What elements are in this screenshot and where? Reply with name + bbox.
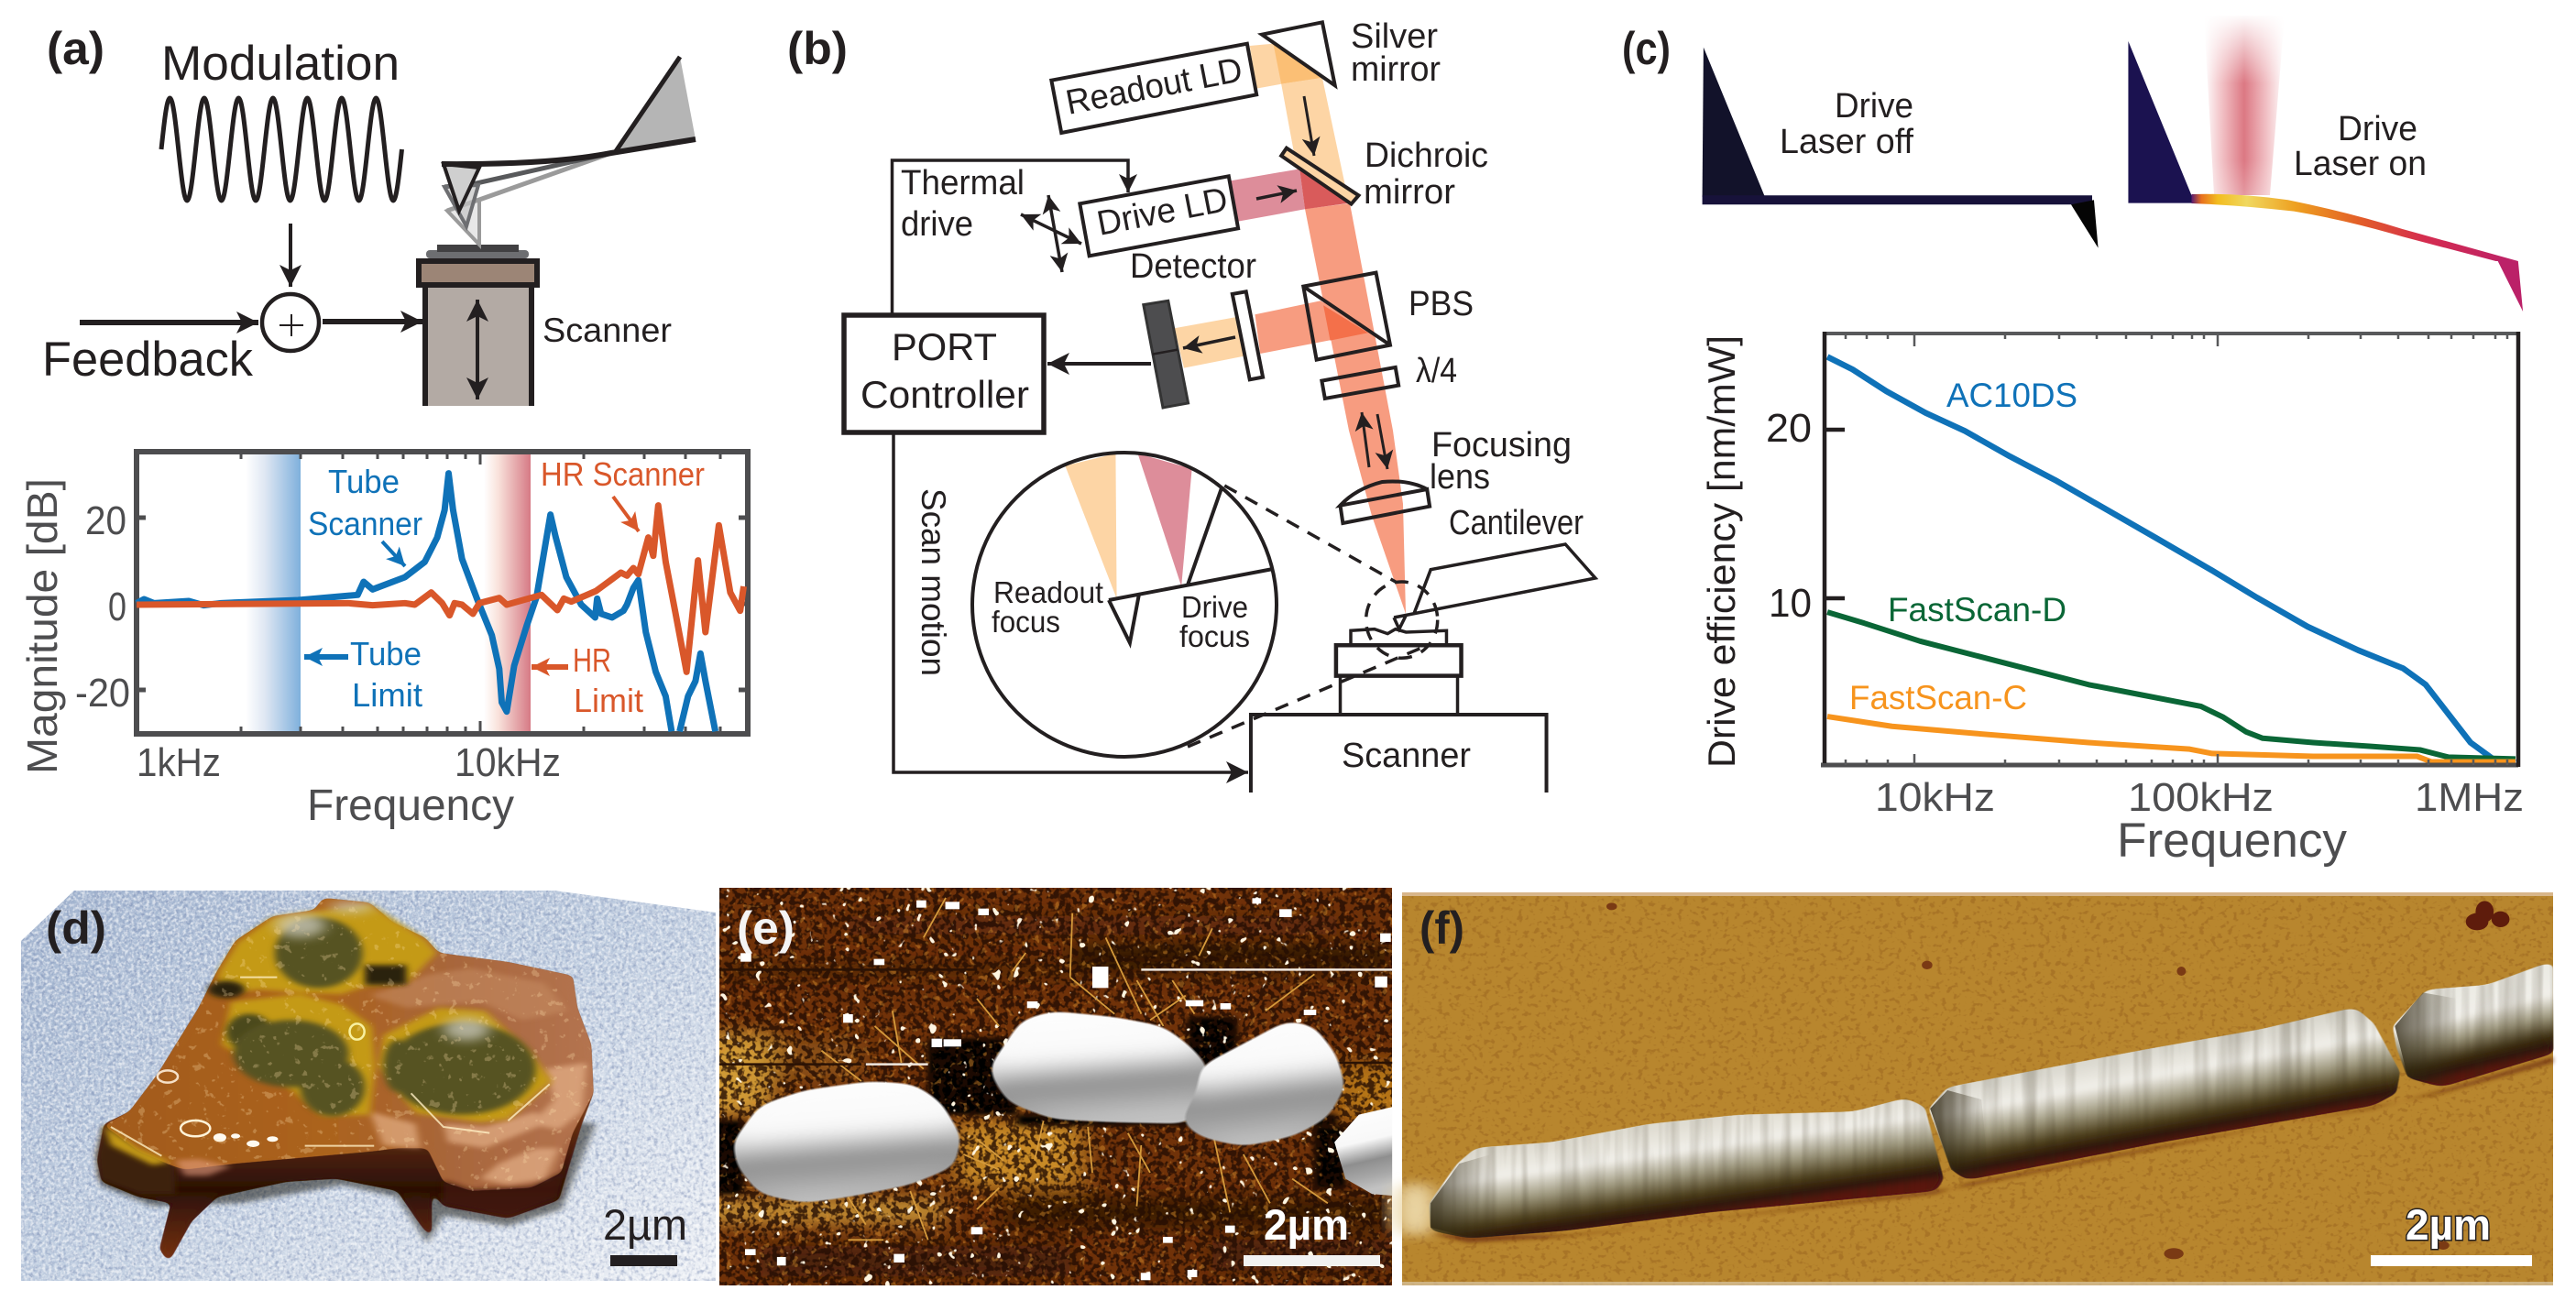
segment three [2393,960,2553,1088]
panel label (c): (c) [1622,23,1671,74]
drive laser diode box [1080,176,1238,256]
magnified inset circle [972,453,1277,757]
text: optic labels: Silver [1351,17,1438,56]
detector [1144,301,1189,408]
olive lump centres [208,918,536,1116]
x axis tick labels: 1MHz [2415,775,2524,820]
glow at chain start [1395,1182,1437,1237]
surface debris [1606,901,2509,1259]
text: optic labels: mirror [1364,173,1455,212]
panel (b): optical layout schematic [787,17,1595,793]
inset labels: Readout [993,575,1103,609]
panel (e): AFM image of bacteria and fibres [688,888,1412,1285]
label: Drive Laser on: Drive [2338,110,2417,148]
arrow: tube scanner pointer [382,541,405,566]
darker lower edge of right lobe [444,1133,573,1216]
arrow: modulation into summing node [289,224,292,287]
dichroic mirror [1281,148,1359,204]
panel label (d): (d) [46,902,106,954]
label: Drive Laser off: Laser off [1780,123,1913,161]
thermal drive signal line [893,160,1128,313]
yellow lumps [104,904,552,1165]
cell topography [97,898,596,1263]
scale label 2µm: 2µm [1264,1200,1349,1249]
cantilever, drive laser on [2128,41,2523,312]
bright reflections [111,978,550,1156]
curve labels: FastScan-D [1888,591,2066,629]
chain shadow [1431,1056,2553,1243]
curve label: Tube Scanner: Tube [328,463,400,500]
inset labels [992,575,1250,653]
readout beam focus wedge [1065,454,1117,598]
scanner tube icon [419,245,537,406]
text: optic labels: mirror [1351,50,1441,89]
curve: FastScan-C [1827,716,2516,761]
panel (a): modulated scanner schematic and transfer function [18,23,748,830]
callout: HR Limit [573,641,643,719]
cell top surface [104,898,594,1191]
chart frame and ticks [1821,332,2518,767]
y axis tick labels [1766,406,1812,626]
PORT controller box [844,315,1044,432]
text: optic labels: λ/4 [1416,352,1457,390]
arrow: feedback into summing node [80,320,258,325]
scale bar [1244,1255,1380,1266]
peach highlights [176,968,586,1185]
text: optic labels: Readout LD [1063,50,1245,123]
label: Drive Laser off: Drive [1835,87,1913,126]
callout: HR Limit: Limit [574,682,643,719]
label: Scan motion: Scan motion [915,488,952,676]
label: Drive Laser off [1780,87,1913,161]
label: Scanner: Scanner [1342,737,1471,775]
modulation sine wave [161,98,401,201]
sample [1351,629,1446,644]
x axis title: Frequency [307,782,514,830]
bacterium: dividing right [1181,1020,1345,1147]
y axis tick labels: 0 [108,585,126,629]
text: optic labels [901,17,1584,542]
cast shadow [99,1118,596,1243]
y axis tick labels: -20 [75,671,130,716]
drive beam focus wedge [1138,454,1192,586]
bacterium: centre [991,1011,1208,1124]
inset labels: Drive [1181,590,1248,624]
arrow: tube limit pointer [304,654,348,660]
panel label (e): (e) [737,902,795,954]
y axis title: Magnitude [dB] [18,478,66,774]
text: optic labels: drive [901,205,973,244]
PORT controller box: PORT [892,325,997,368]
text: optic labels: Cantilever [1449,504,1584,542]
arrow: summing node to scanner [323,319,422,324]
scan motion line and arrow [893,432,1248,772]
segment one [1430,1098,1944,1239]
arrow: detector to controller [1047,362,1151,366]
limit band: tube scanner [246,452,301,734]
silver mirror [1262,22,1335,85]
panel (d): AFM image of a cell on a substrate [21,889,716,1281]
x axis tick labels [1875,775,2524,820]
inset labels: focus [992,605,1060,639]
inset cantilever [1109,487,1273,643]
text: optic labels: Focusing [1431,426,1572,465]
panel (f): AFM image of a bacterial chain [1395,892,2553,1285]
scale bar [2371,1255,2532,1266]
callout: Tube Limit [350,635,422,714]
panel (c): cantilever drive diagrams and efficiency chart [1622,14,2524,868]
callout: Tube Limit: Tube [350,635,422,672]
third segment end shading [2395,992,2457,1084]
label: Feedback: Feedback [42,333,253,387]
text: optic labels: Drive LD [1094,180,1231,244]
cantilever, drive laser off [1703,48,2099,248]
quarter wave plate [1321,367,1398,399]
x axis tick labels: 100kHz [2128,775,2274,820]
curve label: HR Scanner: HR Scanner [541,455,705,493]
focusing lens, cantilever, sample stage and scanner [1188,481,1595,793]
y axis tick labels: 20 [1766,406,1812,451]
scale label 2µm: 2µm [603,1200,687,1249]
image background with surface texture [1402,892,2553,1285]
optical filter [1233,291,1263,379]
curve: tube scanner response, second section [680,653,716,731]
optics: mirrors, PBS, filter, wave plate, detector [1051,22,1398,408]
chain streak texture [1430,960,2553,1230]
panel label (f): (f) [1420,902,1464,954]
text: optic labels: Thermal [901,164,1025,202]
curve: FastScan-D [1827,612,2516,759]
grey specular tops [275,902,489,1041]
curve: AC10DS [1827,356,2516,762]
bacterium: left [732,1081,961,1203]
x axis tick labels: 10kHz [455,740,561,785]
x axis title: Frequency [2117,814,2347,868]
arrow: HR limit pointer [532,664,568,670]
scale bar [610,1255,677,1266]
x axis tick labels: 10kHz [1875,775,1995,820]
laser beams [1175,43,1406,614]
readout laser diode box [1051,44,1256,133]
polarizing beam splitter [1303,273,1390,360]
segment left end shading [1930,1090,1989,1179]
curve label: Tube Scanner [308,463,422,542]
curve labels [1849,377,2077,716]
chart frame and ticks [137,452,748,734]
x axis tick labels: 1kHz [137,740,221,785]
y axis tick labels [75,498,130,716]
drive laser beam [2199,14,2289,197]
summing node [262,294,319,351]
heading: Modulation: Modulation [161,37,400,91]
bacteria [732,1011,1392,1203]
y axis title: Drive efficiency [nm/mW] [1700,335,1743,768]
x axis tick labels [137,740,561,785]
curve label: Tube Scanner: Scanner [308,505,422,542]
inset labels: focus [1179,619,1250,653]
text: optic labels: lens [1430,458,1490,497]
icon: drive laser alignment arrows [1021,195,1081,272]
scanner block [1251,715,1547,793]
segment two [1929,1007,2400,1180]
limit band: HR scanner [484,452,531,734]
cell side wall [97,898,594,1263]
panel label (b): (b) [787,23,848,74]
bacterium: clipped at edge [1334,1107,1392,1196]
image background with speckle [688,888,1412,1285]
label: Drive Laser on: Laser on [2294,145,2427,183]
drive efficiency chart [1700,332,2524,868]
label: Drive Laser on [2294,110,2427,183]
y axis tick labels: 10 [1769,581,1812,626]
callout: HR Limit: HR [573,641,611,679]
PORT controller box: Controller [860,373,1029,416]
curve labels: AC10DS [1946,377,2077,414]
text: optic labels: PBS [1409,285,1474,323]
arrow: HR scanner pointer [613,497,639,531]
panel label (a): (a) [47,23,104,74]
cell surface mottling [110,901,592,1191]
magnification dashed guide [1188,486,1438,747]
oscillating cantilever icon [442,57,696,245]
beam arrows [1183,96,1387,469]
transfer function chart [18,452,748,830]
substrate background [21,891,716,1281]
callout: Tube Limit: Limit [352,676,422,714]
curve: tube scanner response [137,474,672,731]
first segment end shading [1431,1154,1491,1237]
cantilever chip [1394,544,1595,629]
y axis tick labels: 20 [85,498,126,543]
curve: HR scanner response [137,506,744,672]
curve labels: FastScan-C [1849,679,2027,716]
text: optic labels: Detector [1130,247,1256,286]
focusing lens [1341,481,1430,523]
label: Scanner: Scanner [543,312,672,349]
fibres, scan lines and bright particles [719,898,1392,1280]
left lobe dark wall [97,1125,176,1194]
text: optic labels: Dichroic [1365,137,1488,175]
scale label 2µm: 2µm [2406,1200,2491,1249]
sample stage [1336,645,1462,714]
bacterial chain [1395,953,2553,1246]
